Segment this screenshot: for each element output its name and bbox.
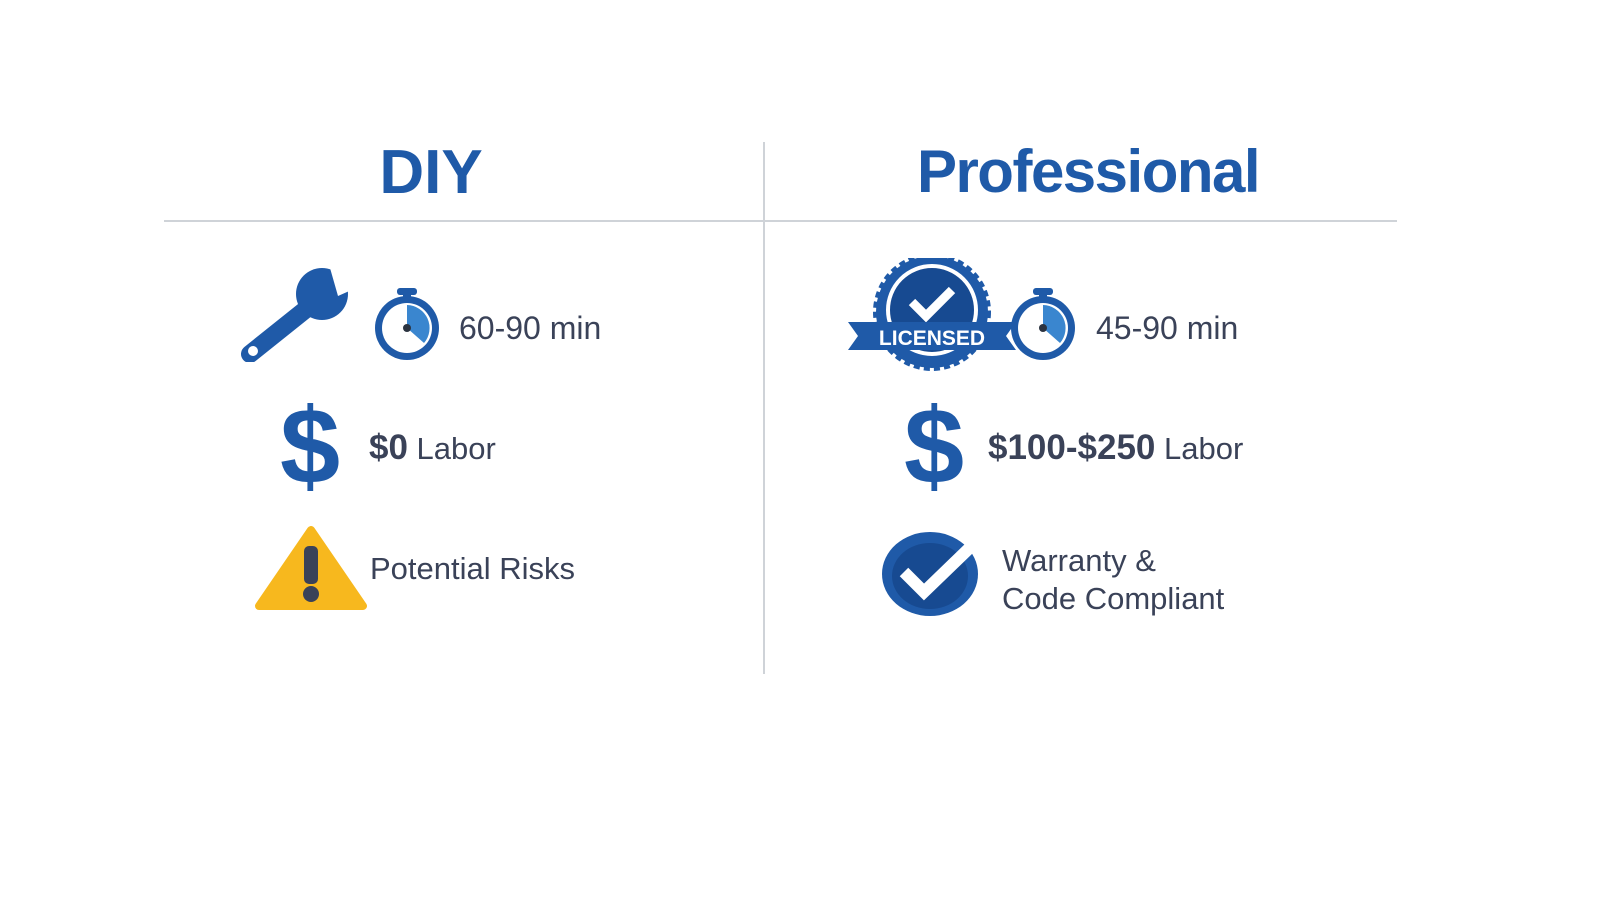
icon: wrench — [241, 268, 348, 362]
text: DIY labor: $0 Labor — [369, 428, 496, 467]
text: pro time: 45-90 min — [1096, 310, 1238, 346]
text: risks: Potential Risks — [370, 551, 575, 586]
icon: stopwatch DIY — [375, 288, 439, 360]
text: warranty — [1002, 543, 1224, 616]
text: warranty: Code Compliant — [1002, 581, 1224, 616]
icon: stopwatch pro — [1011, 288, 1075, 360]
text: pro labor: $100-$250 Labor — [988, 428, 1243, 467]
icon: dollar pro: $ — [904, 385, 964, 506]
icon: warning — [255, 526, 367, 610]
title: DIY: DIY — [379, 138, 483, 207]
icon: licensed badge: LICENSED — [879, 327, 985, 350]
icon: licensed badge — [848, 258, 1016, 371]
icon: dollar DIY: $ — [280, 385, 340, 506]
title: Professional: Professional — [917, 138, 1259, 205]
text: warranty: Warranty & — [1002, 543, 1156, 578]
icon: check — [882, 532, 978, 616]
text: DIY time: 60-90 min — [459, 310, 601, 346]
